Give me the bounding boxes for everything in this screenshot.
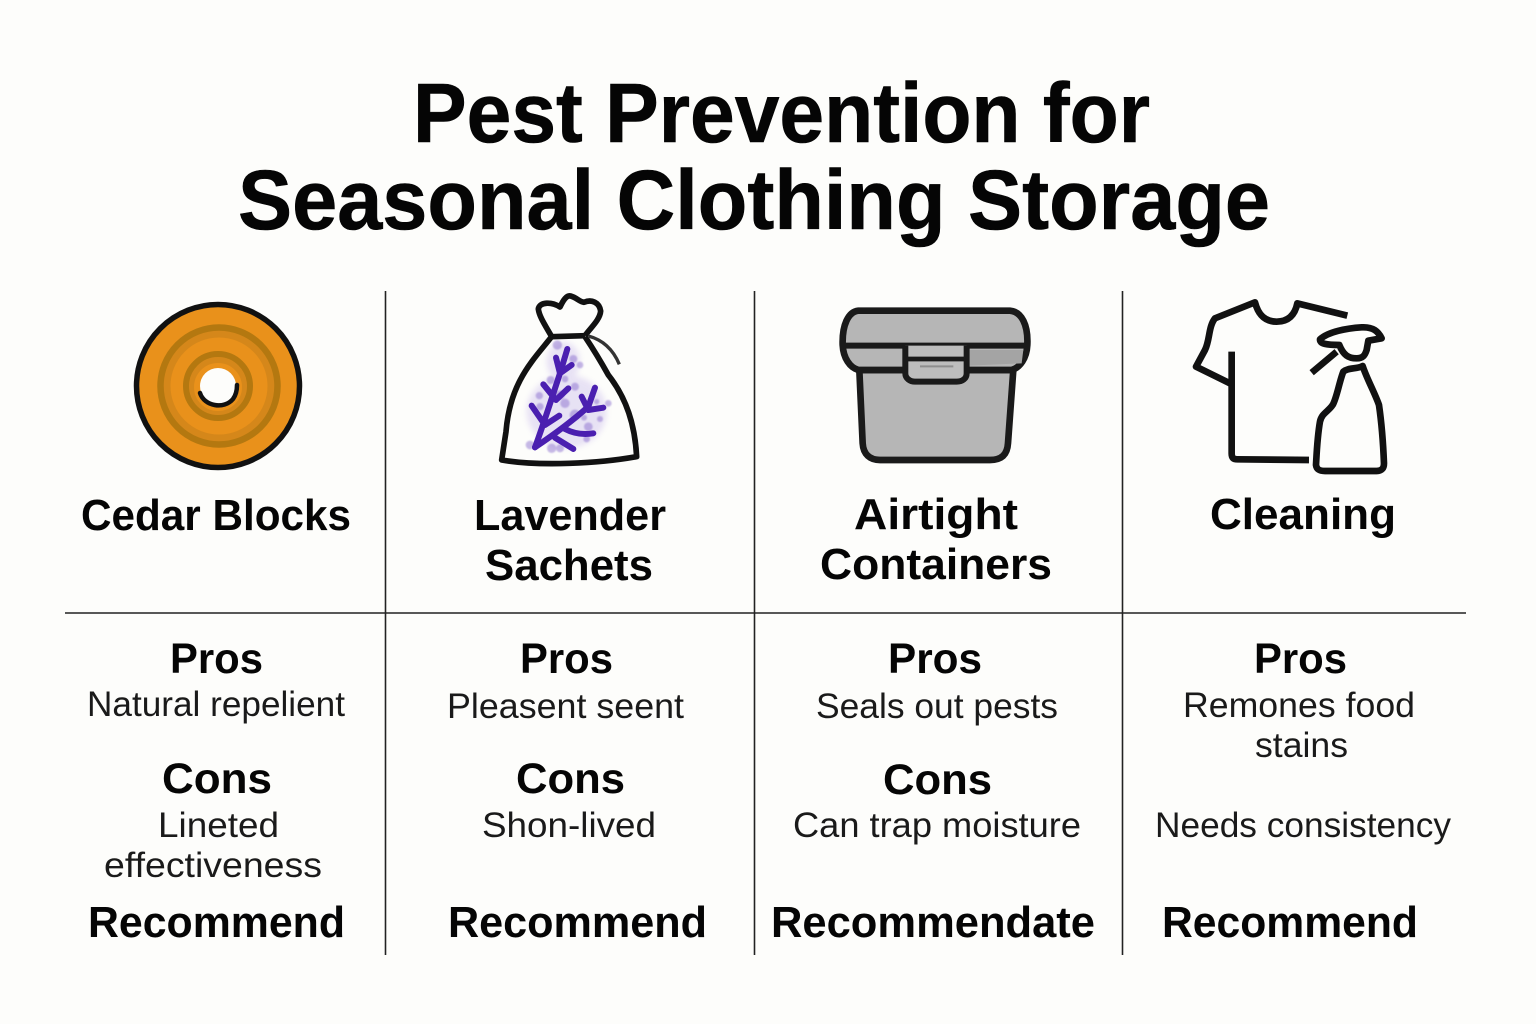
cons: lavender sachets: Cons — [516, 755, 625, 803]
pros: cedar blocks: Pros — [170, 635, 263, 683]
pros: airtight containers: Seals out pests — [816, 687, 1058, 726]
cons: lavender sachets — [482, 755, 656, 845]
title: Seasonal Clothing Storage — [238, 153, 1270, 247]
heading: lavender sachets — [474, 491, 666, 590]
title: Pest Prevention for — [413, 66, 1150, 160]
heading: airtight containers: Airtight — [854, 490, 1018, 539]
icon: t-shirt and spray bottle — [1196, 302, 1384, 471]
pros: lavender sachets: Pros — [520, 635, 613, 683]
cons: cedar blocks: Lineted — [158, 806, 279, 845]
recommendation: airtight containers: Recommendate — [771, 898, 1095, 947]
pros: lavender sachets: Pleasent seent — [447, 687, 684, 726]
icon part: t-shirt — [1196, 302, 1347, 383]
icon: cedar block — [136, 304, 300, 468]
panel: lavender sachets — [447, 296, 707, 947]
title — [238, 66, 1270, 247]
panel: airtight containers — [771, 311, 1095, 947]
pros: cleaning: stains — [1255, 726, 1348, 765]
pros: cleaning — [1183, 635, 1415, 765]
recommendation: cleaning: Recommend — [1162, 898, 1418, 947]
heading: lavender sachets: Lavender — [474, 491, 666, 540]
icon: lavender sachet — [502, 296, 637, 464]
pros: lavender sachets — [447, 635, 684, 726]
panel: cleaning — [1155, 302, 1451, 947]
pros: airtight containers — [816, 635, 1058, 726]
cons: airtight containers — [793, 756, 1081, 845]
heading: lavender sachets: Sachets — [485, 541, 653, 590]
heading: airtight containers — [820, 490, 1052, 589]
icon: airtight container — [843, 311, 1027, 460]
cons: cedar blocks — [104, 755, 322, 885]
pros: cedar blocks: Natural repelient — [87, 685, 345, 724]
pros: cleaning: Pros — [1254, 635, 1347, 683]
pros: airtight containers: Pros — [888, 635, 982, 683]
icon part: t-shirt body — [1232, 352, 1309, 460]
cons: lavender sachets: Shon-lived — [482, 806, 656, 845]
panel: cedar blocks — [81, 304, 351, 947]
heading: cleaning: Cleaning — [1210, 490, 1396, 539]
cons: cedar blocks: Cons — [162, 755, 272, 803]
pros: cleaning: Remones food — [1183, 686, 1415, 725]
heading: cedar blocks: Cedar Blocks — [81, 491, 351, 540]
cons: airtight containers: Can trap moisture — [793, 806, 1081, 845]
cons: cleaning: Needs consistency — [1155, 806, 1451, 845]
icon part: spray bottle — [1312, 327, 1384, 471]
recommendation: lavender sachets: Recommend — [448, 898, 707, 947]
recommendation: cedar blocks: Recommend — [88, 898, 345, 947]
cons: cedar blocks: effectiveness — [104, 846, 322, 885]
heading: airtight containers: Containers — [820, 540, 1052, 589]
cons: airtight containers: Cons — [883, 756, 992, 804]
pros: cedar blocks — [87, 635, 345, 724]
